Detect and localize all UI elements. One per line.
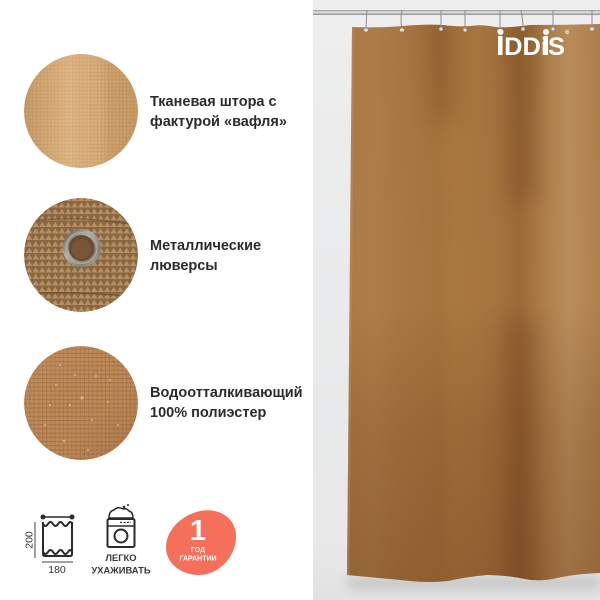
badge: 1 year warranty: 1 (190, 515, 206, 547)
icon: dimensions 180x200: 200 (24, 531, 36, 549)
photo: metal grommet swatch (24, 198, 140, 312)
text: waffle fabric: Тканевая штора с (150, 94, 277, 110)
text: polyester: 100% полиэстер (150, 404, 266, 420)
icon: washing machine, easy care: ЛЕГКО (105, 552, 137, 563)
photo: polyester swatch (24, 346, 138, 460)
curtain rod (313, 10, 600, 15)
panel: curtain photo (313, 0, 600, 600)
icon: dimensions 180x200 (24, 514, 74, 576)
text: polyester (150, 385, 303, 420)
text: waffle fabric: фактурой «вафля» (150, 114, 287, 130)
floor shadow under curtain (345, 576, 600, 590)
text: metal grommets (150, 238, 261, 274)
logo: IDDIS: iDDiS (497, 33, 565, 61)
icon: washing machine, easy care: УХАЖИВАТЬ (91, 564, 151, 576)
icon: dimensions 180x200: 180 (48, 564, 66, 576)
text: metal grommets: Металлические (150, 238, 261, 254)
text: polyester: Водоотталкивающий (150, 385, 303, 401)
badge: 1 year warranty (166, 510, 236, 575)
curtain hooks and grommets (364, 10, 594, 33)
badge: 1 year warranty: ГОД (191, 547, 205, 554)
photo: waffle fabric swatch (24, 54, 138, 168)
text: metal grommets: люверсы (150, 258, 218, 274)
icon: washing machine, easy care (91, 504, 151, 576)
curtain fabric (340, 10, 600, 600)
text: waffle fabric (150, 94, 287, 130)
badge: 1 year warranty: ГАРАНТИИ (179, 556, 217, 562)
